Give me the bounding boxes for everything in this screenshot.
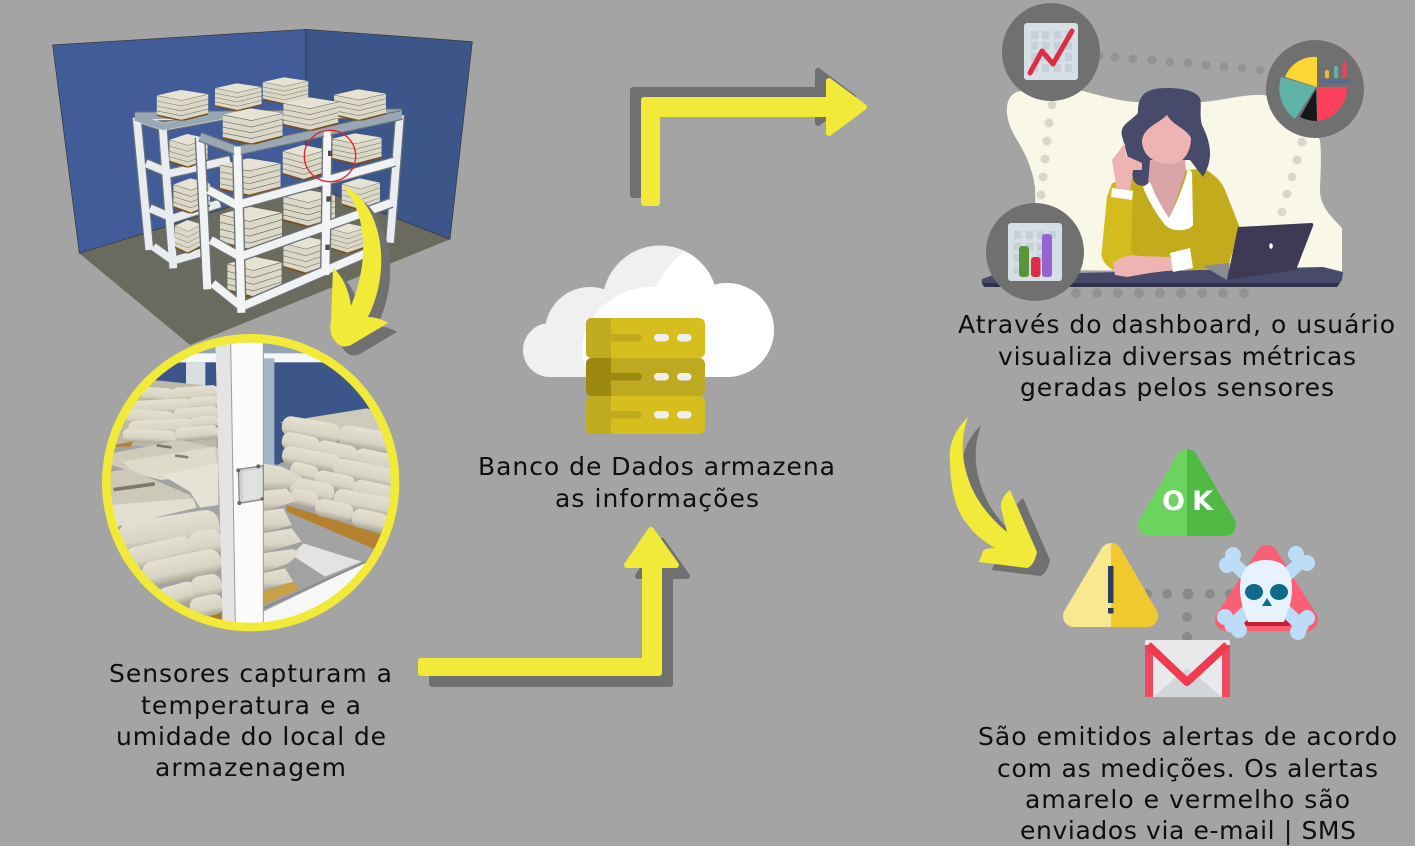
raised hand (1112, 143, 1142, 192)
caption: alerts (978, 722, 1397, 845)
caption: alerts: enviados via e-mail | SMS (1020, 816, 1356, 845)
bags, right stack (280, 408, 381, 431)
woman (1102, 88, 1240, 277)
blue wall (155, 362, 370, 465)
OK green triangle (1149, 460, 1225, 525)
front rack (200, 115, 402, 313)
caption: sensors (109, 659, 392, 782)
curved arrow: room to sensor detail (330, 185, 397, 355)
server stack (586, 318, 705, 434)
OK green triangle: OK (1162, 486, 1214, 517)
bags, left stack (117, 380, 217, 448)
collar (1143, 169, 1193, 230)
red highlight circle (304, 130, 356, 182)
sensor enclosure (236, 464, 264, 505)
caption: sensors: armazenagem (155, 753, 346, 782)
forearm (1113, 255, 1174, 277)
caption: dashboard: Através do dashboard, o usuário (958, 310, 1395, 339)
desk (982, 267, 1343, 287)
sweater (1102, 168, 1240, 270)
caption: alerts: amarelo e vermelho são (1025, 785, 1350, 814)
caption: sensors: temperatura e a (141, 691, 361, 720)
sensors (325, 151, 332, 250)
curved arrow: dashboard to alerts (950, 417, 1050, 576)
top bag stacks (157, 77, 386, 144)
line chart badge (1002, 3, 1100, 101)
pie chart badge (1266, 40, 1364, 138)
bar chart badge (986, 203, 1084, 301)
back rack (135, 113, 402, 268)
caption: sensors: umidade do local de (116, 722, 386, 751)
cloud (520, 240, 780, 380)
caption: dashboard: visualiza diversas métricas (998, 342, 1356, 371)
left wall (53, 29, 306, 253)
caption: database: Banco de Dados armazena (478, 452, 835, 481)
right wall (306, 29, 472, 239)
arrow: sensors to database (421, 530, 687, 684)
face (1142, 115, 1191, 164)
floor (79, 177, 450, 345)
caption: dashboard: geradas pelos sensores (1020, 373, 1334, 402)
caption: database: as informações (555, 484, 759, 513)
red danger skull (1217, 546, 1315, 640)
caption: sensors: Sensores capturam a (109, 659, 392, 688)
floor and pallet (263, 543, 383, 625)
yellow ring (106, 338, 395, 627)
hair (1121, 88, 1210, 186)
caption: alerts: São emitidos alertas de acordo (978, 722, 1397, 751)
lower bag stacks (169, 133, 382, 297)
arrow: database to dashboard (633, 71, 864, 203)
connector dots (1071, 52, 1264, 298)
alert icons (1074, 460, 1315, 697)
cream background blob (1007, 89, 1342, 272)
neck and chest (1148, 160, 1186, 222)
sensor detail circular photo (103, 335, 400, 632)
gmail envelope (1145, 640, 1230, 697)
caption: dashboard (958, 310, 1395, 402)
post (215, 342, 236, 623)
bags behind post (262, 463, 302, 590)
dashboard illustration (982, 3, 1364, 301)
warehouse room with shelving (53, 29, 472, 345)
caption: alerts: com as medições. Os alertas (997, 754, 1378, 783)
connector dots (1142, 588, 1235, 642)
cloud database icon (520, 240, 780, 434)
laptop (1203, 223, 1313, 280)
sleeve cuff (1170, 248, 1193, 272)
yellow warning triangle (1074, 554, 1147, 616)
cuff (1111, 188, 1133, 200)
caption: database (478, 452, 835, 513)
